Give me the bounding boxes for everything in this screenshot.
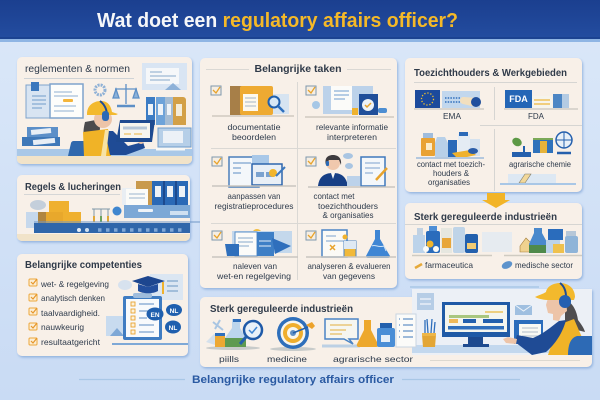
task: contact met toezichthouders: contact met (314, 192, 355, 201)
chair (68, 141, 101, 156)
task: naleven van wet- en regelgeving: wet-en regelgeving (216, 272, 291, 281)
language bubbles: NL (169, 325, 177, 332)
small wall panel (417, 293, 434, 310)
conveyor belt (34, 222, 200, 233)
mail icon (515, 305, 532, 315)
heading: Regels & lucheringen (25, 181, 121, 193)
illustration: documents and gear (26, 82, 105, 118)
contact met toezichthouders en organisaties: contact met toezich- (417, 160, 485, 169)
language bubbles: EN (150, 312, 160, 319)
panel: regels & lucheringen (17, 175, 200, 241)
contact met toezichthouders en organisaties: organisaties (428, 178, 470, 187)
bottle (377, 323, 395, 347)
title: Wat doet een regulatory affairs officer? (97, 10, 458, 32)
contact met toezichthouders en organisaties: houders & (433, 169, 470, 178)
task: naleven van wet- en regelgeving (212, 229, 298, 281)
arrow (482, 193, 510, 208)
FDA (504, 90, 578, 121)
labels: medicine (267, 354, 307, 364)
checklist: nauwkeurig (41, 323, 84, 332)
document (396, 314, 416, 347)
language bubbles: NL (170, 308, 178, 315)
task: contact met toezichthouders: & organisaties (322, 211, 374, 220)
FDA: FDA (528, 112, 545, 121)
boxes (26, 200, 81, 228)
panel: toezichthouders & werkgebieden (405, 58, 582, 192)
illustration: clipboard and graduation cap (106, 274, 188, 344)
checklist: taalvaardigheid. (41, 309, 100, 318)
contact met toezichthouders en organisaties (416, 132, 485, 187)
task: analyseren en evalueren: van gegevens (323, 272, 375, 281)
task: relevante informatie interpreteren: relevante informatie (316, 123, 388, 132)
FDA: FDA (509, 94, 528, 104)
target icon (270, 317, 316, 351)
task: contact met toezichthouders (306, 153, 395, 220)
task: documentatie beoordelen: beoordelen (232, 133, 276, 142)
heading: Sterk gereguleerde industrieën (414, 211, 557, 223)
checklist: resultaatgericht (41, 338, 101, 347)
labels: agrarische sector (333, 354, 413, 364)
pills illustration (206, 319, 262, 350)
task: relevante informatie interpreteren (305, 86, 394, 142)
task: naleven van wet- en regelgeving: naleven van (233, 262, 277, 271)
heading: Toezichthouders & Werkgebieden (414, 67, 567, 79)
checklist: wet- & regelgeving (40, 280, 109, 289)
worker (83, 101, 145, 156)
checklist: analytisch denken (41, 294, 105, 303)
task: contact met toezichthouders: toezichthouders (318, 202, 378, 211)
EMA (414, 90, 484, 121)
labels: piills (219, 354, 239, 364)
test tubes (92, 206, 122, 222)
task: aanpassen van registratieprocedures: registratieprocedures (214, 202, 294, 211)
icon: small screen (142, 63, 187, 90)
header banner (0, 0, 600, 42)
worker at desk (503, 283, 592, 355)
panel: reglementen & normen (17, 57, 192, 164)
footer caption: Belangrijke regulatory affairs officer (192, 374, 395, 386)
panel: sterk gereguleerde industrieën (bottom) (200, 283, 592, 367)
EMA: EMA (443, 112, 462, 121)
speech bubble (322, 319, 360, 346)
legend: medische sector (501, 260, 573, 270)
heading: Belangrijke taken (254, 63, 342, 75)
labels (219, 354, 413, 364)
small monitor (156, 128, 191, 149)
pen cup (422, 319, 436, 347)
icon: stacked books (22, 127, 60, 146)
background sketch (482, 232, 512, 252)
bottles left (412, 226, 492, 256)
agrarische chemie: agrarische chemie (509, 160, 571, 169)
laptop (116, 120, 155, 142)
heading: reglementen & normen (25, 64, 130, 75)
monitor (442, 302, 510, 347)
panel: belangrijke taken (200, 58, 397, 288)
agrarische chemie (500, 132, 576, 184)
language bubbles (146, 304, 182, 334)
icon: scales (113, 84, 139, 106)
panel: sterk gereguleerde industrieën (right) (405, 203, 582, 279)
legend: medische sector: medische sector (515, 261, 573, 270)
task: analyseren en evalueren (306, 230, 396, 281)
tablet (514, 320, 543, 344)
task: aanpassen van registratieprocedures (212, 155, 296, 211)
panel: belangrijke competenties (17, 254, 188, 356)
task: relevante informatie interpreteren: interpreteren (327, 133, 377, 142)
legend: farmaceutica: farmaceutica (425, 261, 473, 270)
folders and binders (122, 181, 190, 218)
heading: Belangrijke competenties (25, 259, 142, 271)
desk (17, 149, 192, 156)
heading: Sterk gereguleerde industrieën (210, 303, 353, 315)
task: documentatie beoordelen: documentatie (228, 123, 281, 132)
checklist (29, 279, 109, 347)
bottles right (504, 228, 582, 256)
task: documentatie beoordelen (211, 86, 294, 142)
icon: binders (146, 97, 186, 125)
orange flask (357, 320, 378, 347)
task: analyseren en evalueren: analyseren & evalueren (308, 262, 391, 271)
task: aanpassen van registratieprocedures: aanpassen van (228, 192, 281, 201)
